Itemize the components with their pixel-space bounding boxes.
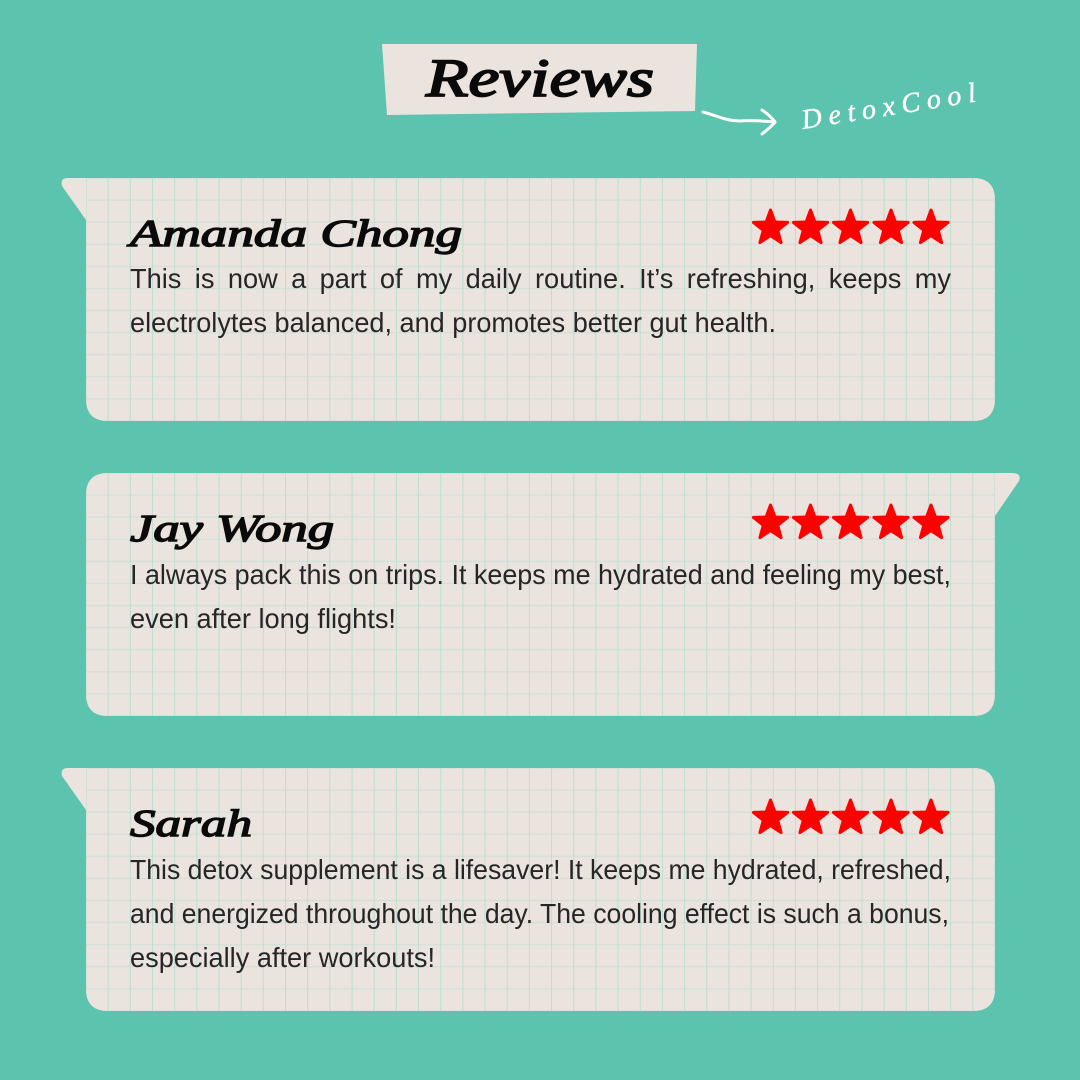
review text: This is now a part of my daily routine. It’s refreshing, keeps my xyxy=(130,263,951,294)
review text: and energized throughout the day. The cooling effect is such a bonus, xyxy=(130,898,949,929)
star rating xyxy=(753,210,948,243)
review text: I always pack this on trips. It keeps me hydrated and feeling my best, xyxy=(130,559,951,590)
review card: Jay Wong xyxy=(86,473,1020,716)
star rating xyxy=(753,800,948,833)
review text: especially after workouts! xyxy=(130,942,435,973)
review card: Amanda Chong xyxy=(62,178,995,421)
reviewer name: Jay Wong xyxy=(130,508,334,550)
reviewer name: Amanda Chong xyxy=(126,213,462,255)
title label: Reviews xyxy=(425,48,654,108)
review text: This detox supplement is a lifesaver! It keeps me hydrated, refreshed, xyxy=(130,854,951,885)
review text xyxy=(130,263,951,338)
arrow xyxy=(703,110,775,134)
reviewer name: Sarah xyxy=(130,803,252,845)
title label xyxy=(382,44,697,115)
review text: even after long flights! xyxy=(130,603,396,634)
review text xyxy=(130,854,951,973)
review text xyxy=(130,559,951,634)
brand name: DetoxCool xyxy=(798,78,978,136)
review card: Sarah xyxy=(62,768,995,1011)
star rating xyxy=(753,505,948,538)
review text: electrolytes balanced, and promotes better gut health. xyxy=(130,307,776,338)
